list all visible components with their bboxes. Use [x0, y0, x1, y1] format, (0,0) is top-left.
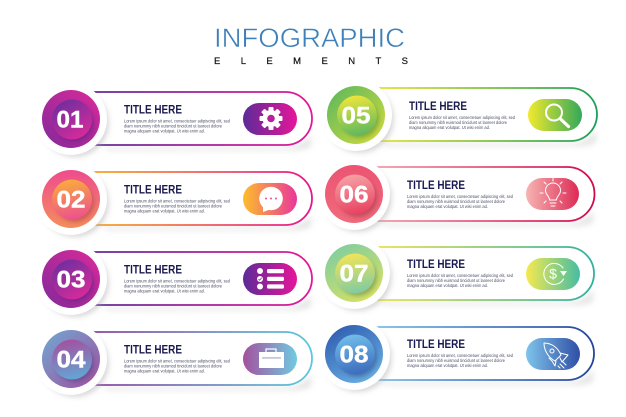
text: step 05 [409, 101, 515, 131]
number badge 03: 03 [56, 266, 86, 294]
text: step 02: diam nonummy nibh euismod tincidunt ut laoreet dolore [124, 204, 222, 210]
icon pill: rocket [526, 338, 580, 370]
title: INFOGRAPHIC [214, 23, 405, 53]
number badge 05 [320, 79, 394, 152]
icon pill: light bulb [526, 178, 579, 210]
text: step 05: Lorem ipsum dolor sit amet, consectetuer adipiscing elit, sed [409, 115, 515, 121]
text: step 04: TITLE HERE [124, 344, 182, 356]
text: step 08: diam nonummy nibh euismod tincidunt ut laoreet dolore [407, 358, 505, 364]
text: step 07: Lorem ipsum dolor sit amet, consectetuer adipiscing elit, sed [407, 273, 513, 279]
text: step 08: Lorem ipsum dolor sit amet, consectetuer adipiscing elit, sed [407, 353, 513, 359]
number badge 07: 07 [340, 260, 368, 288]
icon pill: gear [243, 103, 297, 135]
number badge 02 [35, 163, 108, 236]
number badge 01 [35, 83, 108, 156]
text: step 06: diam nonummy nibh euismod tincidunt ut laoreet dolore [407, 199, 505, 205]
number badge 01: 01 [56, 106, 84, 134]
text: step 01 [124, 104, 230, 134]
panel: step 06 [318, 158, 594, 232]
subtitle: ELEMENTS [214, 56, 408, 67]
number badge 05: 05 [342, 102, 370, 130]
text: step 04: Lorem ipsum dolor sit amet, consectetuer adipiscing elit, sed [124, 358, 230, 364]
panel: step 03 [35, 243, 312, 316]
text: step 06 [407, 180, 513, 210]
text: step 06: TITLE HERE [407, 180, 465, 192]
icon pill: dollar cycle [526, 258, 580, 290]
icon pill: briefcase [243, 343, 297, 375]
text: step 03: diam nonummy nibh euismod tincidunt ut laoreet dolore [124, 284, 222, 290]
number badge 06: 06 [340, 182, 368, 208]
number badge 03 [35, 243, 108, 316]
panel: step 02 [35, 163, 312, 236]
panel: step 08 [318, 318, 594, 392]
panel: step 04 [35, 323, 312, 396]
text: step 08: magna aliquam erat volutpat. Ut wisi enim ad. [407, 363, 488, 369]
number badge 06 [318, 158, 392, 232]
text: step 08: TITLE HERE [407, 339, 465, 351]
text: step 07: magna aliquam erat volutpat. Ut wisi enim ad. [407, 283, 488, 289]
text: step 01: TITLE HERE [124, 104, 182, 116]
number badge 04: 04 [56, 346, 86, 374]
number badge 07 [318, 237, 392, 310]
text: step 02: TITLE HERE [124, 184, 182, 196]
text: step 04: magna aliquam erat volutpat. Ut wisi enim ad. [124, 368, 205, 374]
title [214, 23, 408, 67]
text: step 04 [124, 344, 230, 374]
text: step 06: magna aliquam erat volutpat. Ut wisi enim ad. [407, 204, 488, 210]
text: step 05: diam nonummy nibh euismod tincidunt ut laoreet dolore [409, 120, 507, 126]
number badge 02: 02 [56, 186, 86, 214]
text: step 05: magna aliquam erat volutpat. Ut wisi enim ad. [409, 125, 490, 131]
text: step 02: magna aliquam erat volutpat. Ut wisi enim ad. [124, 208, 205, 214]
text: step 04: diam nonummy nibh euismod tincidunt ut laoreet dolore [124, 364, 222, 370]
text: step 03 [124, 264, 230, 294]
number badge 04 [35, 323, 108, 396]
text: step 07: diam nonummy nibh euismod tincidunt ut laoreet dolore [407, 278, 505, 284]
text: step 02 [124, 184, 230, 214]
text: step 05: TITLE HERE [409, 101, 467, 113]
text: step 03: Lorem ipsum dolor sit amet, consectetuer adipiscing elit, sed [124, 278, 230, 284]
icon pill: checklist [243, 263, 297, 295]
icon pill: speech bubble [243, 183, 297, 215]
panel: step 01 [35, 83, 312, 156]
panel: step 05 [320, 79, 597, 152]
text: step 07 [407, 259, 513, 289]
text: step 02: Lorem ipsum dolor sit amet, consectetuer adipiscing elit, sed [124, 198, 230, 204]
panel: step 07 [318, 237, 594, 310]
text: step 01: Lorem ipsum dolor sit amet, consectetuer adipiscing elit, sed [124, 118, 230, 124]
text: step 01: diam nonummy nibh euismod tincidunt ut laoreet dolore [124, 124, 222, 130]
icon pill: dollar cycle: $ [549, 266, 557, 282]
text: step 01: magna aliquam erat volutpat. Ut wisi enim ad. [124, 128, 205, 134]
text: step 03: magna aliquam erat volutpat. Ut wisi enim ad. [124, 288, 205, 294]
number badge 08 [318, 318, 392, 392]
icon pill: magnifier [528, 99, 582, 131]
text: step 07: TITLE HERE [407, 259, 465, 271]
text: step 08 [407, 339, 513, 369]
text: step 03: TITLE HERE [124, 264, 182, 276]
number badge 08: 08 [340, 342, 368, 368]
text: step 06: Lorem ipsum dolor sit amet, consectetuer adipiscing elit, sed [407, 194, 513, 200]
